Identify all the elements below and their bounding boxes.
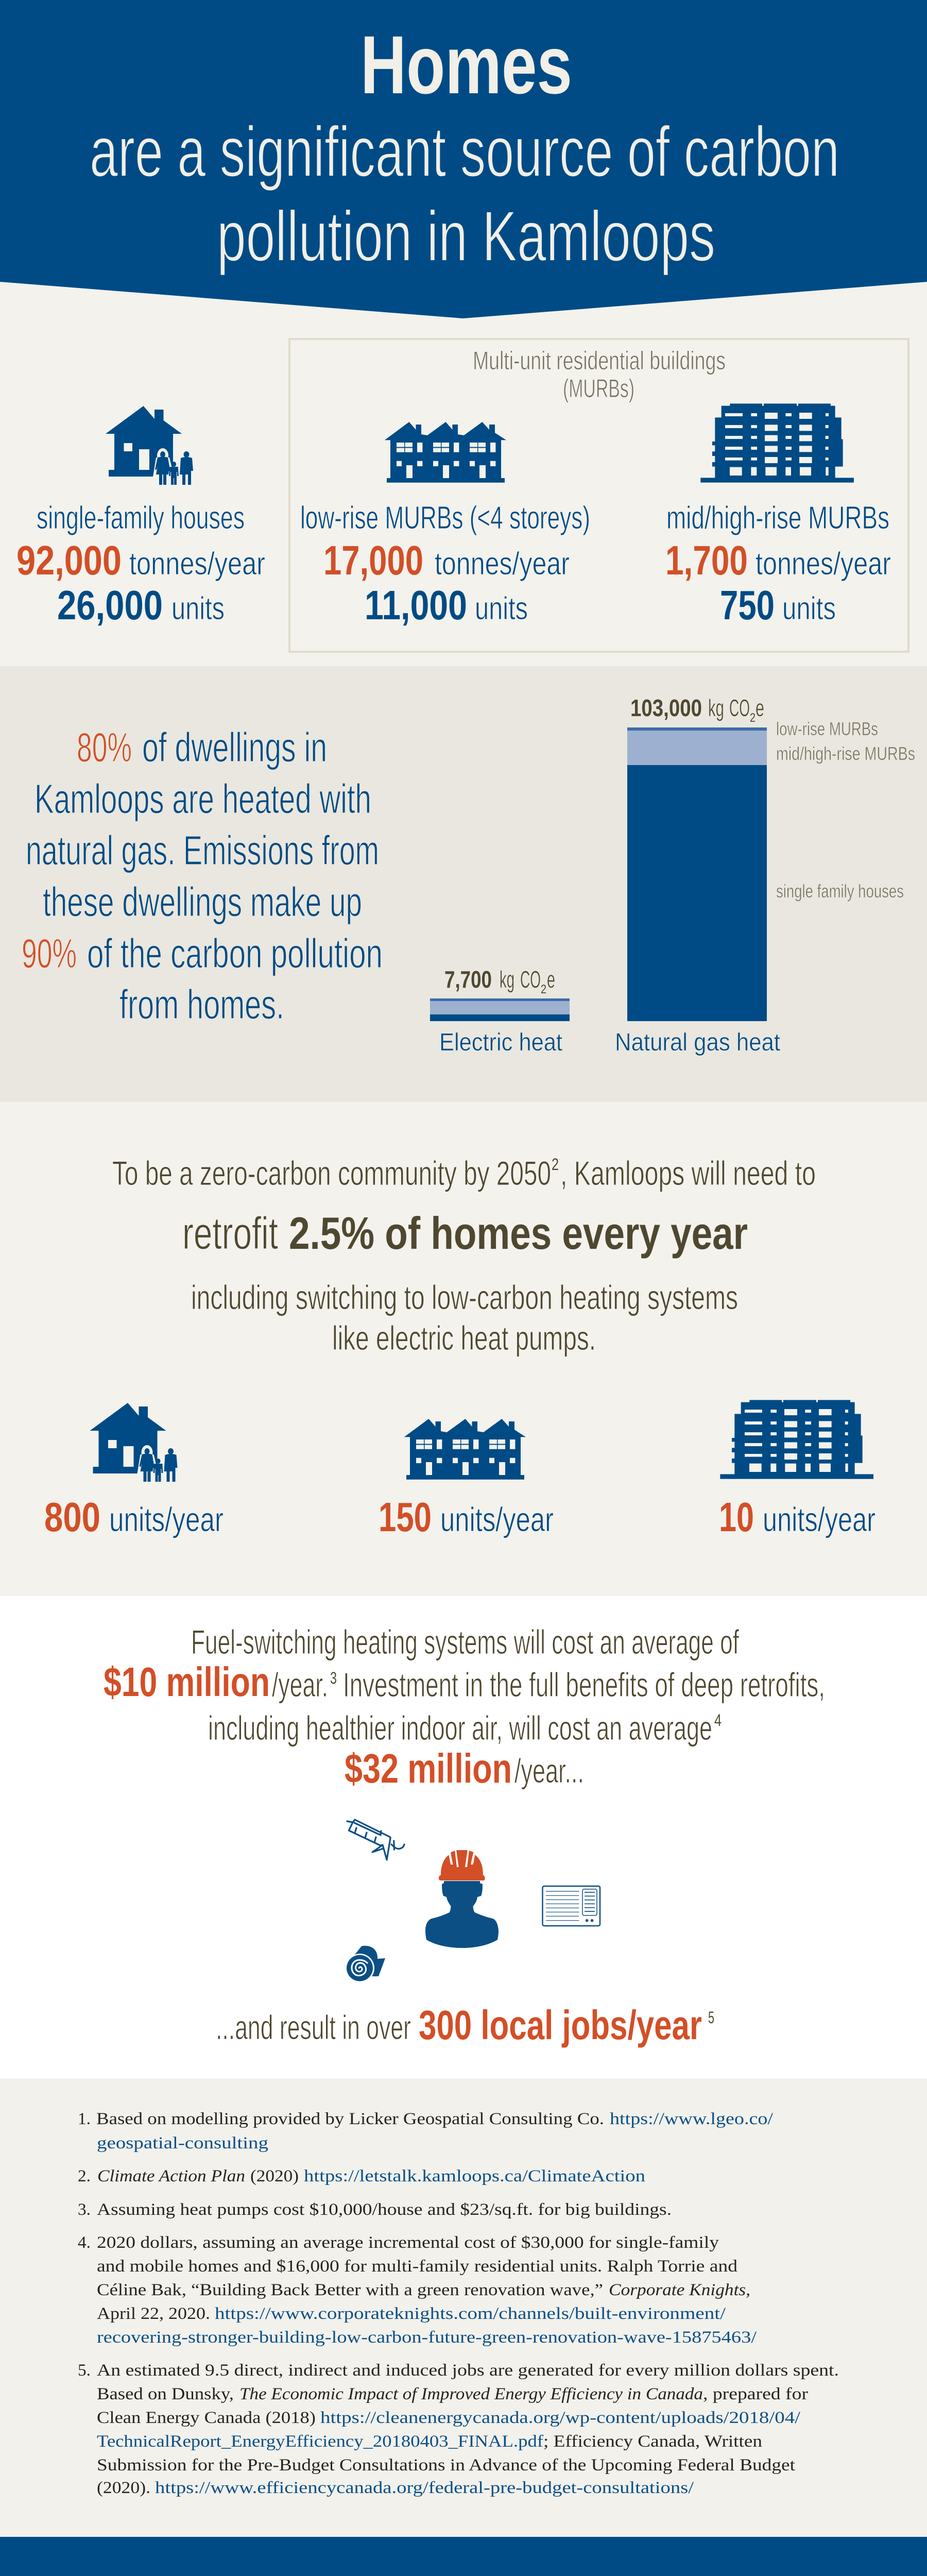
MURB box heading (473, 346, 726, 403)
footnote 5: Clean Energy Canada (2018) (97, 2409, 316, 2427)
value label: electric (444, 966, 555, 996)
heading: retrofit rate (182, 1208, 748, 1259)
footnote 5: ; Efficiency Canada, Written (543, 2432, 762, 2451)
footnote 5 (78, 2361, 839, 2497)
value label: electric: 2 (541, 982, 546, 996)
heading: retrofit rate: 2.5% of homes every year (289, 1208, 748, 1259)
title: Homes (360, 19, 572, 111)
text block: cost of retrofits: 3 (330, 1669, 337, 1687)
stat: 150 units per year: units/year (440, 1500, 554, 1538)
stat: mid/high-rise MURBs: tonnes/year (756, 546, 891, 582)
bar: natural gas heat (627, 727, 767, 1021)
header arrow shape (0, 0, 927, 318)
footnote 4: Céline Bak, “Building Back Better with a green renovation wave,” (97, 2281, 603, 2299)
footnote 5: , prepared for (703, 2385, 808, 2403)
footnote 5: https://www.efficiencycanada.org/federal-pre-budget-consultations/ (155, 2479, 694, 2497)
panel: costs and jobs (0, 1596, 927, 2078)
value label: natural gas: 2 (750, 711, 756, 725)
icon: row houses (404, 1419, 526, 1480)
footnote 5: 5. (78, 2361, 91, 2380)
banner background (0, 2537, 927, 2576)
text block: cost of retrofits: 4 (714, 1711, 722, 1730)
text block: heat pumps (191, 1278, 738, 1357)
footnote 4: recovering-stronger-building-low-carbon-future-green-renovation-wave-15875463/ (97, 2328, 757, 2347)
text block: heat pumps: like electric heat pumps. (332, 1319, 596, 1357)
axis labels (439, 1029, 780, 1056)
text block: heat pumps: including switching to low-carbon heating systems (191, 1278, 738, 1316)
hard hat (439, 1850, 485, 1880)
footnote 1: geospatial-consulting (97, 2134, 268, 2153)
footnote 1 (78, 2110, 774, 2153)
stat: low-rise MURBs: low-rise MURBs (<4 storeys) (300, 500, 590, 536)
value label: natural gas: kg (708, 694, 724, 721)
subtitle (90, 112, 839, 276)
footnote 5: An estimated 9.5 direct, indirect and induced jobs are generated for every million dollars spent. (97, 2361, 839, 2380)
icon: caulking gun (347, 1820, 404, 1860)
stat: 150 units per year (379, 1494, 554, 1540)
MURB bracket box (289, 339, 908, 652)
stat: 800 units per year: 800 (44, 1494, 100, 1540)
stat: 10 units per year: units/year (763, 1500, 876, 1538)
icon: worker with hard hat (425, 1850, 499, 1948)
stat: mid/high-rise MURBs (665, 500, 891, 628)
footnote 4: https://www.corporateknights.com/channels/built-environment/ (215, 2304, 726, 2323)
stat: 800 units per year (44, 1494, 224, 1540)
value label: natural gas (630, 694, 764, 725)
footnote 2: https://letstalk.kamloops.ca/ClimateAction (304, 2167, 645, 2185)
footnote 5: (2020). (97, 2479, 150, 2497)
footnote 4: 4. (78, 2233, 91, 2252)
text block: cost of retrofits: $32 million (345, 1745, 512, 1791)
panel: emissions by building type (16, 339, 908, 652)
footnote 2: 2. (78, 2167, 91, 2185)
footnote 5: TechnicalReport_EnergyEfficiency_20180403_FINAL.pdf (97, 2432, 543, 2451)
icon: low-rise row houses (385, 422, 506, 483)
footnote 4: 2020 dollars, assuming an average incremental cost of $30,000 for single-family (97, 2233, 719, 2252)
axis labels: Electric heat (439, 1029, 562, 1056)
footnote 4 (78, 2233, 757, 2347)
stat: 800 units per year: units/year (109, 1500, 224, 1538)
text block: natural gas share (22, 724, 383, 1027)
footnote 3: Assuming heat pumps cost $10,000/house and $23/sq.ft. for big buildings. (97, 2200, 672, 2219)
text block: jobs result: 5 (708, 2008, 714, 2027)
stat: single-family houses: units (171, 591, 225, 626)
icon: mid/high-rise building (700, 403, 854, 483)
heading: retrofit rate: retrofit (182, 1208, 278, 1259)
text block: natural gas share: of dwellings in (142, 724, 327, 770)
text block: cost of retrofits: /year... (514, 1752, 584, 1790)
panel background (0, 2078, 927, 2537)
text block: zero-carbon goal: To be a zero-carbon community by 2050 (112, 1154, 551, 1192)
footnote 1: https://www.lgeo.co/ (610, 2110, 774, 2128)
text block: natural gas share: 90% (22, 930, 77, 976)
text block: cost of retrofits: $10 million (104, 1659, 270, 1705)
panel background (0, 666, 927, 1102)
subtitle: pollution in Kamloops (217, 197, 715, 276)
MURB box heading: Multi-unit residential buildings (473, 346, 726, 375)
stat: single-family houses: single-family houses (37, 500, 245, 536)
stat: single-family houses (16, 500, 265, 628)
bar chart: emissions by heat source (430, 694, 915, 1056)
footnote 2: (2020) (250, 2167, 299, 2185)
value label: natural gas: 103,000 (630, 694, 702, 721)
value label: electric: kg (500, 966, 514, 993)
icon: air conditioner (543, 1886, 600, 1926)
text block: natural gas share: 80% (77, 724, 132, 770)
text block: jobs result: 300 local jobs/year (419, 2002, 702, 2048)
text block: natural gas share: Kamloops are heated with (35, 776, 371, 822)
value label: natural gas: CO (729, 694, 750, 721)
stat: low-rise MURBs: 17,000 (323, 537, 423, 583)
stat: mid/high-rise MURBs: units (782, 591, 836, 626)
stat: mid/high-rise MURBs: 1,700 (665, 537, 748, 583)
text block: cost of retrofits: including healthier indoor air, will cost an average (208, 1709, 712, 1747)
legend labels: low-rise MURBs (776, 718, 878, 739)
text block: natural gas share: of the carbon pollution (87, 930, 383, 976)
bar: electric heat (430, 998, 570, 1021)
panel: heating comparison (0, 666, 927, 1102)
icon: apartment building (720, 1400, 873, 1479)
header banner (0, 0, 927, 318)
panel: footnotes (0, 2078, 927, 2537)
footnote 5: Based on Dunsky, (97, 2385, 234, 2403)
stat: 10 units per year (719, 1494, 876, 1540)
footnote 4: Corporate Knights, (609, 2281, 750, 2299)
stat: 150 units per year: 150 (379, 1494, 432, 1540)
footnote 2: Climate Action Plan (97, 2167, 245, 2185)
footnote 5: The Economic Impact of Improved Energy Efficiency in Canada (239, 2385, 703, 2403)
text block: zero-carbon goal: 2 (552, 1155, 559, 1174)
text block: cost of retrofits (104, 1623, 825, 1791)
value label: electric: 7,700 (444, 966, 492, 993)
value label: electric: CO (520, 966, 541, 993)
footnote 5: Submission for the Pre-Budget Consultations in Advance of the Upcoming Federal Budget (97, 2456, 795, 2475)
text block: cost of retrofits: /year. (272, 1666, 328, 1704)
MURB box heading: (MURBs) (563, 374, 634, 403)
stat: single-family houses: 92,000 (16, 537, 122, 583)
legend labels (776, 718, 915, 902)
axis labels: Natural gas heat (615, 1029, 780, 1056)
stat: 10 units per year: 10 (719, 1494, 754, 1540)
stat: low-rise MURBs (300, 500, 590, 628)
stat: single-family houses: tonnes/year (129, 546, 265, 582)
value label: electric: e (547, 966, 555, 993)
footnote 5: https://cleanenergycanada.org/wp-content/uploads/2018/04/ (320, 2409, 801, 2427)
icon: single-family house with family (106, 406, 193, 485)
value label: natural gas: e (756, 694, 764, 721)
stat: low-rise MURBs: units (475, 591, 528, 626)
text block: jobs result: ...and result in over (216, 2008, 411, 2046)
text block: zero-carbon goal: , Kamloops will need to (560, 1154, 816, 1192)
footnote 4: April 22, 2020. (97, 2304, 210, 2323)
footnote 2 (78, 2167, 645, 2185)
stat: low-rise MURBs: 11,000 (365, 582, 467, 628)
text block: natural gas share: natural gas. Emissions from (26, 827, 379, 873)
icon: house with family (90, 1403, 177, 1482)
footnote 1: Based on modelling provided by Licker Geospatial Consulting Co. (96, 2110, 604, 2128)
text block: jobs result (216, 2002, 714, 2048)
text block: natural gas share: from homes. (119, 981, 284, 1027)
panel: closing banner (0, 2537, 927, 2576)
footnote 4: and mobile homes and $16,000 for multi-family residential units. Ralph Torrie and (97, 2257, 738, 2276)
stat: single-family houses: 26,000 (57, 582, 163, 628)
text block: natural gas share: these dwellings make up (43, 879, 362, 925)
footnote 1: 1. (78, 2110, 91, 2128)
stat: mid/high-rise MURBs: 750 (720, 582, 775, 628)
worker silhouette (425, 1881, 499, 1948)
panel background (0, 1596, 927, 2078)
footnote 3: 3. (78, 2200, 91, 2219)
icon: insulation roll (346, 1946, 385, 1982)
panel: retrofit targets (44, 1154, 876, 1540)
stat: low-rise MURBs: tonnes/year (435, 546, 570, 582)
